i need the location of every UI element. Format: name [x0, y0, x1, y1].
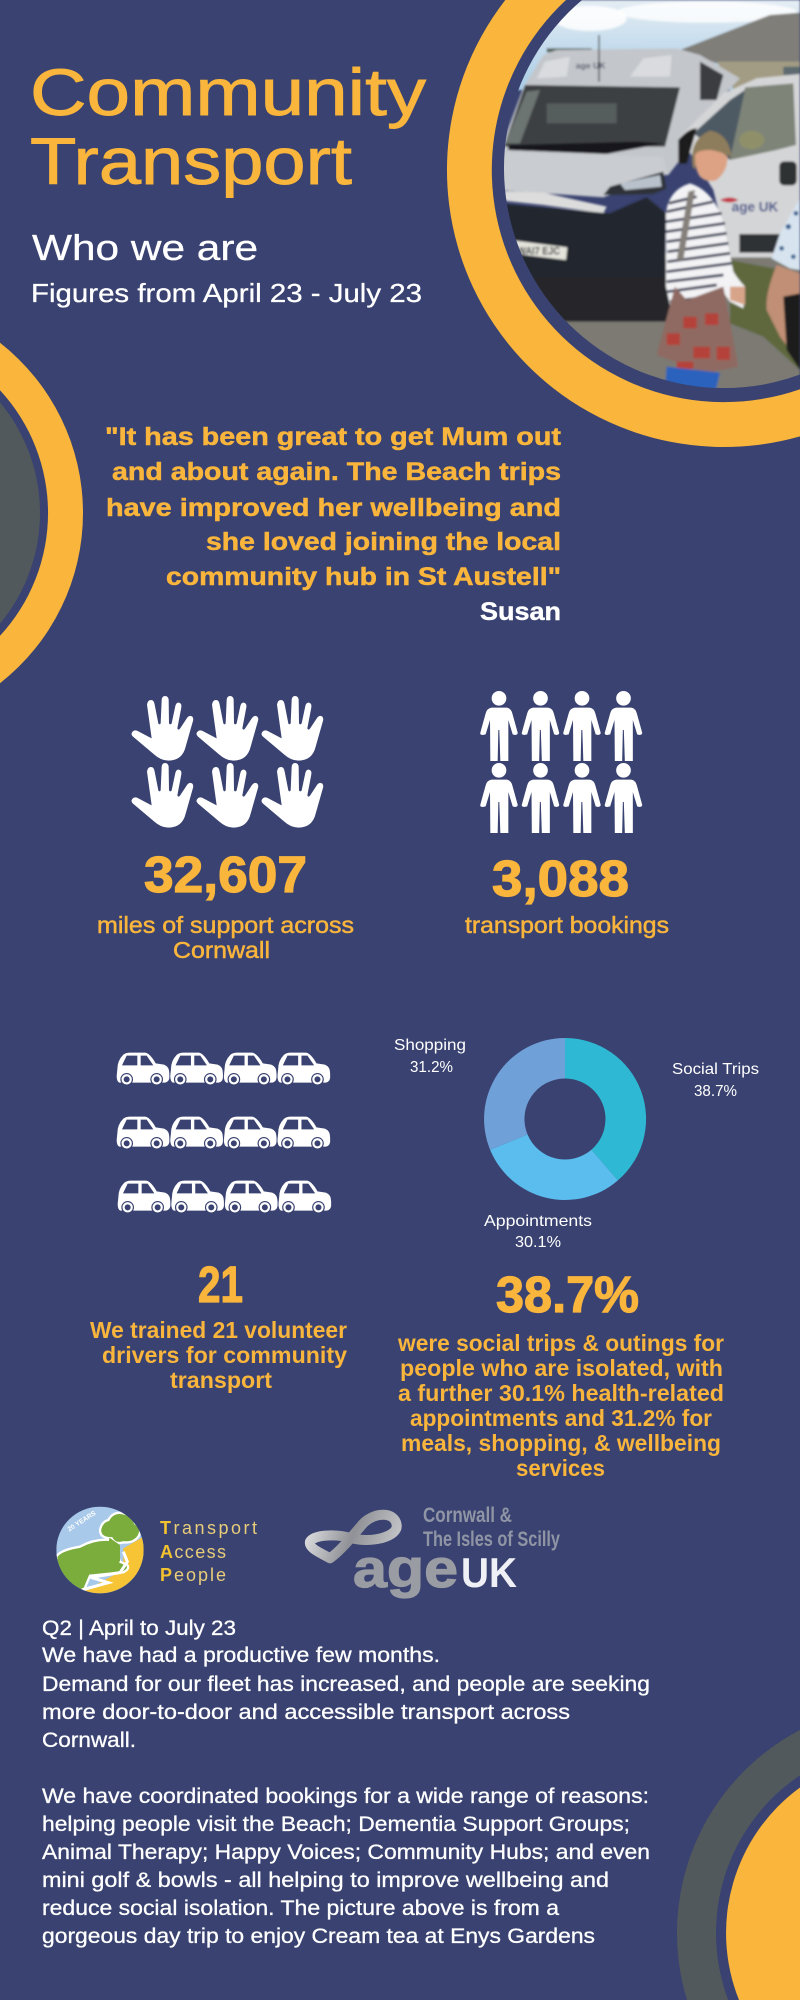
- location text: [423, 1504, 560, 1551]
- segment: appointments: [490, 1134, 618, 1200]
- logo: Age UK: [310, 1504, 560, 1599]
- logo emblem: 20 YEARS: [67, 1510, 98, 1533]
- body text: [42, 1617, 650, 1948]
- stat: miles: [97, 846, 354, 963]
- logo wordmark: [160, 1518, 257, 1585]
- icon grid: hands: [131, 696, 323, 828]
- chart label: social trips: [672, 1061, 759, 1100]
- chart label: appointments: Appointments: [484, 1213, 592, 1230]
- photo: minibus and passenger: WAI7 EJC: [517, 246, 560, 258]
- age wordmark: age: [353, 1539, 458, 1599]
- stat: bookings: [465, 850, 669, 938]
- chart label: shopping: 31.2%: [410, 1059, 453, 1076]
- icon grid: people: [480, 691, 642, 833]
- stat: bookings: 3,088: [492, 850, 629, 907]
- title: Community: [30, 55, 426, 129]
- decorative circle: bottom right: [677, 1730, 800, 2000]
- body text: We have coordinated bookings for a wide range of reasons:: [42, 1785, 649, 1808]
- body text: reduce social isolation. The picture above is from a: [42, 1897, 559, 1920]
- logo emblem: [56, 1507, 144, 1593]
- quote: "It has been great to get Mum out: [105, 423, 562, 451]
- stat: social trips: people who are isolated, with: [400, 1355, 723, 1381]
- chart label: social trips: Social Trips: [672, 1061, 759, 1078]
- stat: volunteer drivers: 21: [198, 1256, 243, 1313]
- stat: miles: miles of support across: [97, 912, 354, 938]
- location text: The Isles of Scilly: [423, 1528, 560, 1551]
- stat: miles: 32,607: [144, 846, 307, 903]
- chart label: social trips: 38.7%: [694, 1083, 737, 1100]
- date range: Figures from April 23 - July 23: [31, 278, 422, 308]
- title: Transport: [30, 124, 352, 198]
- logo wordmark: Transport: [160, 1518, 257, 1538]
- stat: social trips: 38.7%: [496, 1266, 639, 1323]
- photo: minibus and passenger: [504, 0, 800, 388]
- location text: Cornwall &: [423, 1504, 512, 1527]
- photo: minibus and passenger: age UK: [732, 199, 778, 215]
- body text: helping people visit the Beach; Dementia Support Groups;: [42, 1813, 630, 1836]
- quote: [105, 423, 562, 626]
- body text: Demand for our fleet has increased, and people are seeking: [42, 1673, 650, 1696]
- decorative circle: left: [0, 343, 83, 683]
- panel: photo ring: [447, 0, 800, 447]
- chart label: appointments: 30.1%: [515, 1234, 561, 1251]
- stat: volunteer drivers: drivers for community: [102, 1342, 347, 1368]
- quote: and about again. The Beach trips: [112, 458, 561, 486]
- logo: Transport Access People: [56, 1507, 257, 1593]
- icon grid: cars: [117, 1053, 331, 1214]
- body text: gorgeous day trip to enjoy Cream tea at Enys Gardens: [42, 1925, 595, 1948]
- quote: she loved joining the local: [206, 528, 561, 556]
- stat: volunteer drivers: We trained 21 volunteer: [90, 1317, 347, 1343]
- chart label: appointments: [484, 1213, 592, 1251]
- body text: more door-to-door and accessible transport across: [42, 1701, 570, 1724]
- photo: minibus and passenger: age UK: [576, 60, 606, 70]
- segment: shopping: [484, 1038, 565, 1150]
- body text: Cornwall.: [42, 1729, 136, 1752]
- body text: Animal Therapy; Happy Voices; Community Hubs; and even: [42, 1841, 650, 1864]
- chart label: shopping: Shopping: [394, 1037, 466, 1054]
- body text: We have had a productive few months.: [42, 1644, 440, 1667]
- stat: miles: Cornwall: [173, 937, 270, 963]
- stat: social trips: were social trips & outings for: [397, 1330, 724, 1356]
- body text: Q2 | April to July 23: [42, 1617, 236, 1640]
- subtitle: Who we are: [32, 227, 258, 268]
- title: [30, 55, 426, 198]
- body text: mini golf & bowls - all helping to improve wellbeing and: [42, 1869, 609, 1892]
- stat: social trips: meals, shopping, & wellbeing: [401, 1430, 721, 1456]
- stat: volunteer drivers: [90, 1256, 347, 1393]
- logo wordmark: Access: [160, 1542, 226, 1562]
- infinity ribbon: [310, 1515, 397, 1558]
- logo wordmark: People: [160, 1565, 226, 1585]
- stat: social trips: [397, 1266, 724, 1481]
- quote: Susan: [480, 598, 561, 626]
- stat: social trips: a further 30.1% health-related: [398, 1380, 724, 1406]
- stat: social trips: services: [516, 1455, 605, 1481]
- donut chart: trip purposes: [394, 1037, 759, 1251]
- stat: volunteer drivers: transport: [170, 1367, 272, 1393]
- gold ring: [447, 0, 800, 447]
- chart label: shopping: [394, 1037, 466, 1076]
- stat: social trips: appointments and 31.2% for: [410, 1405, 712, 1431]
- UK wordmark: UK: [461, 1549, 517, 1596]
- quote: have improved her wellbeing and: [106, 494, 561, 522]
- segment: social trips: [565, 1038, 646, 1180]
- quote: community hub in St Austell": [166, 563, 561, 591]
- stat: bookings: transport bookings: [465, 912, 669, 938]
